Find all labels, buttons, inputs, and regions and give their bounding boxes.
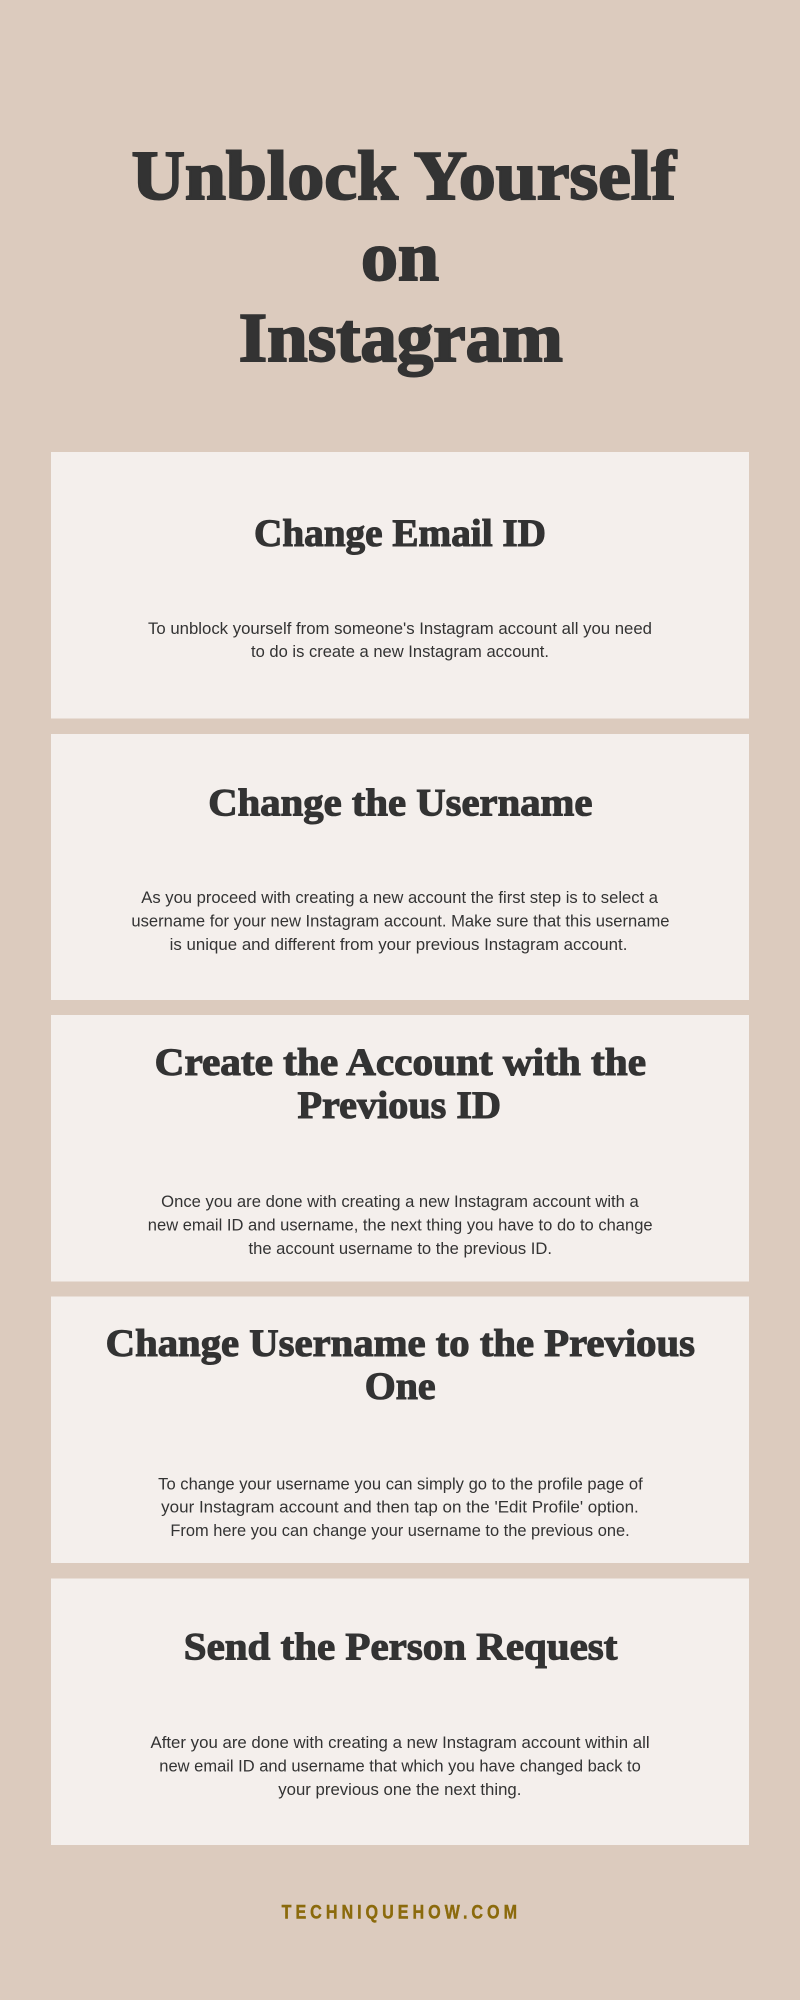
footer: website: TECHNIQUEHOW.COM [282,1901,517,1923]
heading: change username to the previous one [106,1322,695,1408]
heading: change username to the previous one: Change Username to the Previous [106,1322,695,1365]
text block: change username to the previous one: From here you can change your username to the previous one. [170,1522,630,1540]
heading: send the person request: Send the Person Request [184,1626,617,1669]
panel: create the account with the previous id [51,1015,749,1282]
text block: send the person request: After you are done with creating a new Instagram account within all [150,1734,650,1752]
text block: change the username: username for your new Instagram account. Make sure that this username [131,913,669,931]
text block: change the username [131,889,669,954]
panel: change username to the previous one [51,1296,749,1563]
heading: create the account with the previous id [155,1041,646,1127]
heading: change email id: Change Email ID [254,512,546,555]
text block: change the username: As you proceed with creating a new account the first step is to select a [141,889,659,907]
heading: create the account with the previous id: Previous ID [298,1084,501,1127]
text block: send the person request: your previous one the next thing. [278,1781,521,1799]
text block: change email id: to do is create a new Instagram account. [251,643,549,661]
text block: create the account with the previous id: new email ID and username, the next thing you have to do to change [148,1216,653,1234]
text block: create the account with the previous id: Once you are done with creating a new Instagram account with a [161,1193,640,1211]
heading: change username to the previous one: One [365,1365,436,1408]
title [132,138,677,377]
text block: change email id: To unblock yourself from someone's Instagram account all you need [148,620,652,638]
heading: change the username: Change the Username [208,782,593,825]
text block: send the person request: new email ID and username that which you have changed back to [159,1758,641,1776]
panel: send the person request [51,1578,749,1845]
text block: change username to the previous one [158,1475,643,1540]
title: on [361,219,439,296]
text block: create the account with the previous id [148,1193,653,1258]
text block: change email id [148,620,652,661]
text block: send the person request [150,1734,650,1799]
text block: create the account with the previous id: the account username to the previous ID. [248,1240,552,1258]
title: Instagram [239,300,563,377]
text block: change the username: is unique and different from your previous Instagram account. [170,936,627,954]
panel: change the username [51,734,749,1000]
text block: change username to the previous one: To change your username you can simply go to the profile page of [158,1475,643,1493]
title: Unblock Yourself [132,138,677,215]
text block: change username to the previous one: your Instagram account and then tap on the 'Edit Profile' option. [161,1499,639,1517]
panel: change email id [51,452,749,718]
heading: create the account with the previous id: Create the Account with the [155,1041,646,1084]
